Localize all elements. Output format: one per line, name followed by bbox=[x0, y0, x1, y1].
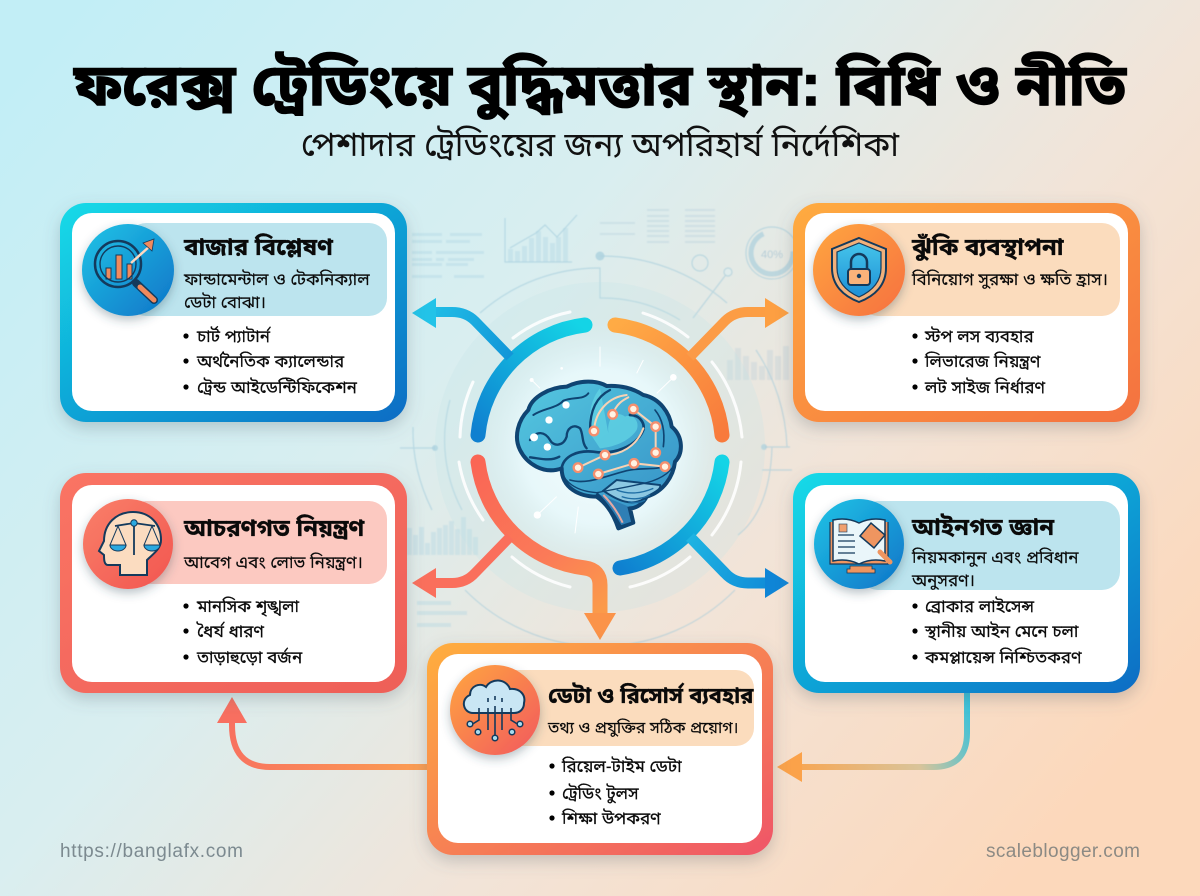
decorative outer arcs bbox=[459, 312, 742, 587]
panel: behavioural control bbox=[60, 473, 407, 693]
background decoration: faint charts: 40% bbox=[761, 249, 783, 261]
bullet list: লট সাইজ নির্ধারণ bbox=[924, 376, 1046, 397]
bullet list: স্থানীয় আইন মেনে চলা bbox=[924, 621, 1079, 641]
bullet list bbox=[912, 326, 1046, 397]
heading: ঝুঁকি ব্যবস্থাপনা bbox=[911, 233, 1065, 261]
arrow: data to behaviour bbox=[217, 697, 427, 767]
heading: বাজার বিশ্লেষণ bbox=[183, 233, 333, 261]
title: ফরেক্স ট্রেডিংয়ে বুদ্ধিমত্তার স্থান: বিধি ও নীতি bbox=[73, 51, 1127, 120]
description: ফান্ডামেন্টাল ও টেকনিক্যাল bbox=[183, 269, 370, 289]
bullet list: স্টপ লস ব্যবহার bbox=[924, 326, 1034, 346]
arrow: to risk management bbox=[615, 298, 789, 435]
icon: shield lock bbox=[813, 224, 905, 316]
arrow: to market analysis bbox=[412, 298, 585, 435]
bullet list: লিভারেজ নিয়ন্ত্রণ bbox=[924, 351, 1041, 371]
bullet list: শিক্ষা উপকরণ bbox=[561, 808, 661, 828]
description: অনুসরণ। bbox=[911, 571, 975, 591]
bullet list bbox=[183, 325, 358, 397]
bullet list bbox=[912, 596, 1082, 667]
bullet list: ট্রেডিং টুলস bbox=[562, 783, 639, 804]
bullet list: মানসিক শৃঙ্খলা bbox=[196, 596, 300, 617]
heading: ডেটা ও রিসোর্স ব্যবহার bbox=[548, 682, 754, 708]
bullet list bbox=[183, 596, 303, 667]
panel: market analysis bbox=[60, 203, 407, 422]
bullet list: অর্থনৈতিক ক্যালেন্ডার bbox=[196, 350, 345, 371]
icon: book and gavel bbox=[814, 499, 904, 589]
description bbox=[911, 547, 1079, 591]
center glow bbox=[470, 317, 730, 577]
description: ডেটা বোঝা। bbox=[184, 292, 266, 312]
background decoration: faint charts bbox=[400, 209, 798, 646]
bullet list: চার্ট প্যাটার্ন bbox=[196, 325, 272, 346]
bullet list: ব্রোকার লাইসেন্স bbox=[925, 596, 1034, 616]
description: আবেগ এবং লোভ নিয়ন্ত্রণ। bbox=[183, 552, 363, 572]
icon: head with scales bbox=[83, 499, 173, 589]
footer: left url: https://banglafx.com bbox=[60, 841, 243, 862]
bullet list: ট্রেন্ড আইডেন্টিফিকেশন bbox=[197, 377, 358, 397]
icon: magnifier chart bbox=[82, 224, 174, 316]
bullet list: তাড়াহুড়ো বর্জন bbox=[196, 646, 303, 667]
arrow: legal to data bbox=[777, 693, 967, 782]
arrow: to legal knowledge bbox=[620, 462, 789, 598]
description: তথ্য ও প্রযুক্তির সঠিক প্রয়োগ। bbox=[547, 718, 739, 737]
bullet list: রিয়েল-টাইম ডেটা bbox=[561, 756, 682, 776]
subtitle: পেশাদার ট্রেডিংয়ের জন্য অপরিহার্য নির্দেশিকা bbox=[301, 125, 900, 164]
description: নিয়মকানুন এবং প্রবিধান bbox=[911, 547, 1079, 568]
bullet list bbox=[549, 756, 682, 828]
footer: right url: scaleblogger.com bbox=[986, 841, 1140, 862]
brain network nodes bbox=[530, 347, 677, 533]
panel: legal knowledge bbox=[793, 473, 1140, 693]
description: বিনিয়োগ সুরক্ষা ও ক্ষতি হ্রাস। bbox=[911, 269, 1108, 290]
arrow: to behavioural control bbox=[412, 462, 616, 640]
panel: data and resources bbox=[427, 643, 773, 855]
icon: brain bbox=[517, 382, 681, 528]
bullet list: ধৈর্য ধারণ bbox=[196, 620, 264, 641]
heading: আচরণগত নিয়ন্ত্রণ bbox=[183, 514, 364, 542]
icon: cloud circuit bbox=[450, 665, 540, 755]
panel: risk management bbox=[793, 203, 1140, 422]
bullet list: কমপ্লায়েন্স নিশ্চিতকরণ bbox=[924, 647, 1082, 667]
description bbox=[183, 269, 370, 312]
heading: আইনগত জ্ঞান bbox=[911, 513, 1055, 541]
central ring backdrop bbox=[435, 282, 765, 612]
